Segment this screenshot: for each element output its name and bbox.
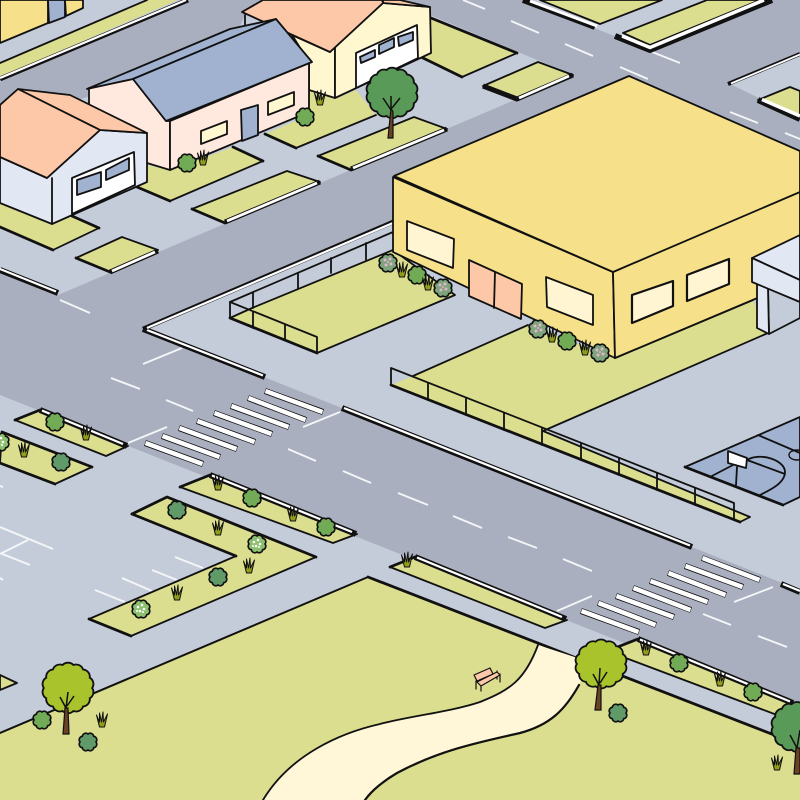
store double door (469, 260, 522, 319)
L-shaped parking planter (89, 497, 316, 636)
store roof (394, 76, 800, 272)
house 1: pale blue with garage (0, 89, 147, 250)
small grass plot near house 1 (76, 237, 158, 272)
top-left neighbouring building and strip (0, 0, 188, 79)
tree: lime by the path (576, 640, 626, 710)
house 2: pink with blue roof (87, 19, 312, 170)
top medians (523, 0, 800, 119)
curb: corner plot (483, 75, 573, 99)
crosswalk east (581, 558, 760, 632)
basketball hoop (728, 451, 747, 485)
curbs along the main road (0, 54, 800, 592)
shrubs at houses (178, 90, 326, 172)
planted bed against the west yard (379, 254, 452, 297)
road-side grass median south-east (615, 639, 793, 715)
store wall: south-east (613, 190, 800, 358)
store window 2 (546, 277, 593, 325)
grass strip near house 2 (192, 171, 320, 223)
road-side grass median by path (390, 552, 567, 628)
fenced yard south-east of the store (391, 300, 768, 522)
median west 1 (15, 410, 128, 456)
pavilion canopy and column (752, 235, 800, 334)
tree: lime on west lawn (43, 663, 93, 734)
store wall: south-west (393, 177, 615, 358)
median west 2 (0, 432, 92, 484)
main park lawn (0, 577, 800, 800)
crosswalk west (145, 391, 323, 464)
grass strip with tree (318, 117, 447, 170)
road markings: stop lines (128, 348, 773, 611)
winding park path (263, 645, 590, 800)
small planter edge bottom-left (0, 675, 17, 690)
median along road (180, 475, 357, 543)
shrubs and grass in the park (33, 704, 783, 770)
store window 4 (687, 259, 729, 301)
tree: dark green by houses (367, 68, 417, 138)
store window 3 (632, 281, 673, 323)
store window 1 (407, 221, 454, 268)
lawn: corner plot (483, 62, 573, 98)
house 3: cream with garage (242, 0, 431, 98)
lawn: between houses 2 and 3 (265, 90, 376, 148)
store building (393, 76, 800, 358)
tree: dark green at right edge (772, 702, 800, 774)
basketball court (685, 417, 800, 505)
parking lot lines (0, 486, 203, 602)
lawn: house 2 front (137, 147, 263, 201)
park bench (474, 668, 500, 691)
fenced yard west of the store (230, 232, 455, 353)
road markings: centre dashes (60, 0, 800, 647)
planted bed against the south-east yard (529, 320, 609, 362)
lawn: top-right of houses (421, 18, 517, 77)
